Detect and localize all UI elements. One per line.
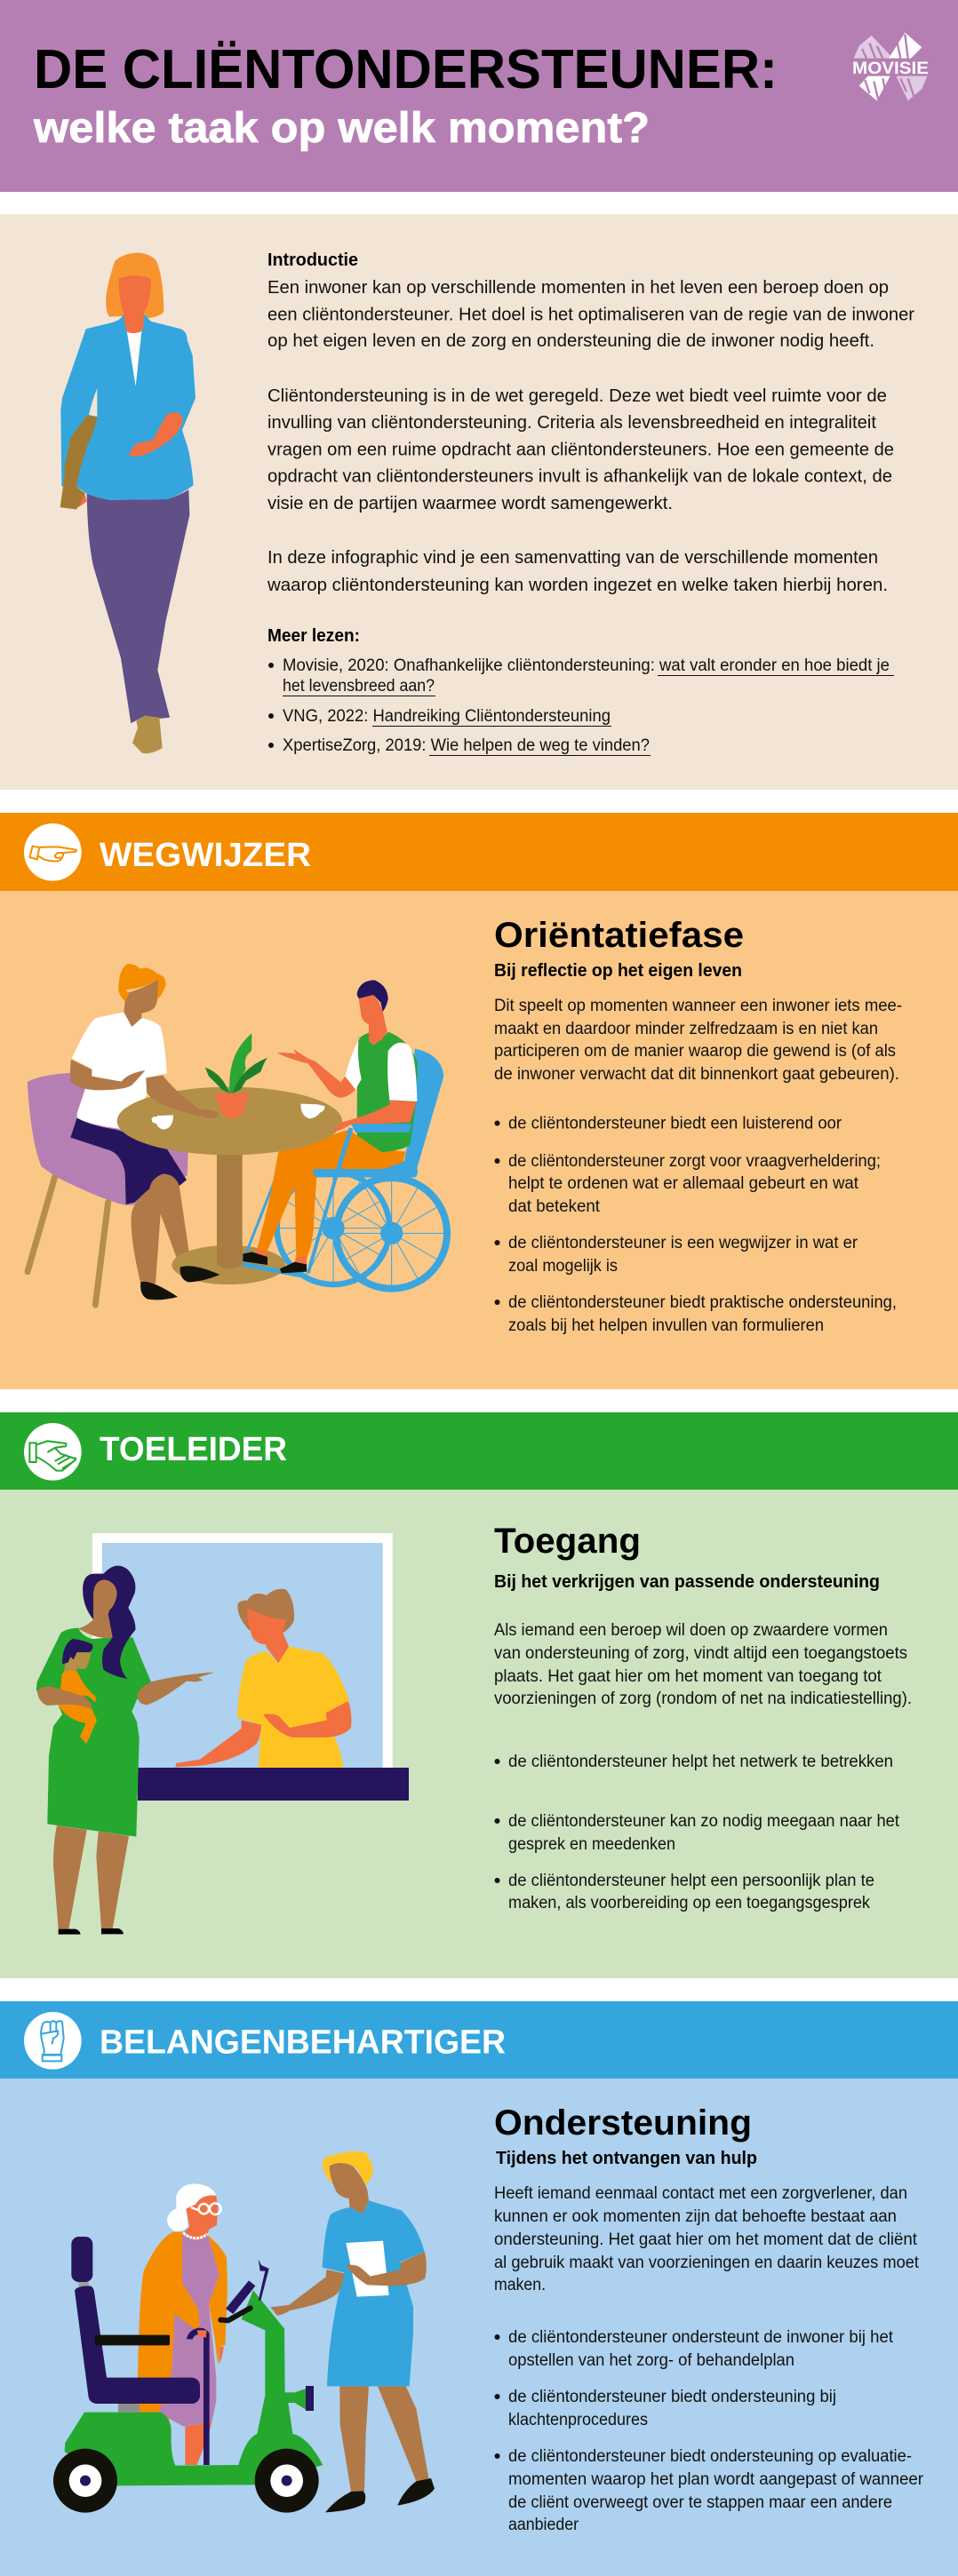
illustration: older woman at mobility scooter with caregiver <box>53 2151 435 2513</box>
text block: meer lezen: VNG, 2022: Handreiking Cliëntondersteuning <box>283 707 611 726</box>
banner: toeleider <box>0 1412 958 1490</box>
list: tasks belangenbehartiger: aanbieder <box>508 2516 579 2534</box>
panel: introductie <box>0 214 958 790</box>
list: tasks toeleider: de cliëntondersteuner helpt het netwerk te betrekken <box>508 1753 893 1771</box>
text block: introductie: vragen om een ruime opdracht aan cliëntondersteuners. Hoe een gemeente de <box>267 439 894 460</box>
text block: meer lezen: Meer lezen: <box>267 625 360 646</box>
text block: introductie: Introductie <box>267 250 358 270</box>
subheading: Bij reflectie op het eigen leven <box>494 960 742 981</box>
list: tasks wegwijzer: de cliëntondersteuner biedt een luisterend oor <box>508 1114 842 1133</box>
text block: description: al gebruik maakt van voorzieningen en daarin keuzes moet <box>494 2254 920 2272</box>
text block: description: Heeft iemand eenmaal contact met een zorgverlener, dan <box>494 2184 907 2203</box>
list: tasks wegwijzer: helpt te ordenen wat er allemaal gebeurt en wat <box>508 1174 859 1193</box>
text block: meer lezen: Movisie, 2020: Onafhankelijke cliëntondersteuning: wat valt eronder en hoe biedt je <box>283 656 890 675</box>
text block: introductie: opdracht van cliëntondersteuners invult is afhankelijk van de lokale context, de <box>267 465 892 487</box>
list: tasks belangenbehartiger: de cliënt overweegt over te stappen maar een andere <box>508 2493 892 2512</box>
heading: orientatiefase: Oriëntatiefase <box>494 916 744 955</box>
icon: raised fist <box>24 2012 82 2070</box>
panel: toeleider <box>0 1412 958 1978</box>
logo: Movisie: MOVISIE <box>852 60 929 78</box>
text block: description: maakt en daardoor minder zelfredzaam is en niet kan <box>494 1020 878 1038</box>
text block: meer lezen: XpertiseZorg, 2019: Wie helpen de weg te vinden? <box>283 736 650 755</box>
text block: introductie <box>267 250 914 595</box>
list: tasks belangenbehartiger: klachtenprocedures <box>508 2411 648 2429</box>
title: DE CLIËNTONDERSTEUNER: <box>34 39 778 100</box>
text block: description: van ondersteuning of zorg, vindt altijd een toegangstoets <box>494 1644 907 1663</box>
banner: belangenbehartiger <box>0 2001 958 2079</box>
text block: description <box>494 997 902 1084</box>
list: tasks wegwijzer: de cliëntondersteuner zorgt voor vraagverheldering; <box>508 1152 881 1171</box>
list: tasks wegwijzer <box>494 1114 897 1335</box>
subheading: Bij het verkrijgen van passende ondersteuning <box>494 1571 880 1592</box>
text block: description: plaats. Het gaat hier om het moment van toegang tot <box>494 1667 882 1686</box>
text block: introductie: Een inwoner kan op verschillende momenten in het leven een beroep doen op <box>267 277 889 298</box>
text block: description: Dit speelt op momenten wanneer een inwoner iets mee- <box>494 997 902 1015</box>
text block: introductie: invulling van cliëntondersteuning. Criteria als levensbreedheid en integraliteit <box>267 412 876 433</box>
text block: introductie: In deze infographic vind je een samenvatting van de verschillende momenten <box>267 547 878 568</box>
illustration: mother with child at a window <box>36 1533 409 1935</box>
text block: description: de inwoner verwacht dat dit binnenkort gaat gebeuren). <box>494 1065 899 1084</box>
subtitle: welke taak op welk moment? <box>33 105 650 152</box>
text block: meer lezen: het levensbreed aan? <box>283 677 435 696</box>
text block: introductie: visie en de partijen waarmee wordt samengewerkt. <box>267 493 673 513</box>
text block: description: participeren om de manier waarop die gewend is (of als <box>494 1042 896 1061</box>
text block: description <box>494 2184 920 2294</box>
list: tasks toeleider: gesprek en meedenken <box>508 1835 675 1854</box>
panel: header <box>0 0 958 192</box>
text block: description: maken. <box>494 2276 546 2294</box>
list: tasks wegwijzer: de cliëntondersteuner biedt praktische ondersteuning, <box>508 1293 897 1312</box>
illustration: walking woman with bag <box>60 253 196 753</box>
list: tasks belangenbehartiger: opstellen van het zorg- of behandelplan <box>508 2351 794 2370</box>
text block: description: Als iemand een beroep wil doen op zwaardere vormen <box>494 1621 888 1640</box>
heading: toegang: Toegang <box>494 1522 641 1561</box>
heading: toeleider: TOELEIDER <box>100 1431 287 1468</box>
panel: wegwijzer <box>0 813 958 1389</box>
text block: introductie: op het eigen leven en de zorg en ondersteuning die de inwoner nodig heeft. <box>267 330 874 351</box>
list: tasks toeleider: de cliëntondersteuner kan zo nodig meegaan naar het <box>508 1812 900 1831</box>
heading: belangenbehartiger: BELANGENBEHARTIGER <box>100 2023 506 2061</box>
icon: pointing hand <box>24 823 82 881</box>
list: tasks belangenbehartiger <box>494 2328 924 2534</box>
text block: introductie: waarop cliëntondersteuning kan worden ingezet en welke taken hierbij horen. <box>267 575 888 595</box>
list: tasks belangenbehartiger: de cliëntondersteuner ondersteunt de inwoner bij het <box>508 2328 894 2347</box>
list: tasks toeleider <box>494 1753 900 1912</box>
text block: description: ondersteuning. Het gaat hier om het moment dat de cliënt <box>494 2230 918 2249</box>
list: tasks wegwijzer: zoals bij het helpen invullen van formulieren <box>508 1316 824 1335</box>
text block: description: kunnen er ook momenten zijn dat behoefte bestaat aan <box>494 2207 897 2226</box>
panel: belangenbehartiger <box>0 2001 958 2576</box>
text block: introductie: Cliëntondersteuning is in de wet geregeld. Deze wet biedt veel ruimte voor de <box>267 386 887 406</box>
text block: introductie: een cliëntondersteuner. Het doel is het optimaliseren van de regie van de inwoner <box>267 304 914 325</box>
text block: meer lezen <box>267 625 894 755</box>
list: tasks wegwijzer: de cliëntondersteuner is een wegwijzer in wat er <box>508 1234 858 1252</box>
list: tasks toeleider: maken, als voorbereiding op een toegangsgesprek <box>508 1894 870 1912</box>
list: tasks belangenbehartiger: momenten waarop het plan wordt aangepast of wanneer <box>508 2470 924 2489</box>
text block: description: voorzieningen of zorg (rondom of net na indicatiestelling). <box>494 1690 912 1708</box>
list: tasks belangenbehartiger: de cliëntondersteuner biedt ondersteuning bij <box>508 2388 836 2406</box>
logo: Movisie <box>852 33 929 100</box>
list: tasks wegwijzer: zoal mogelijk is <box>508 1257 618 1276</box>
list: tasks toeleider: de cliëntondersteuner helpt een persoonlijk plan te <box>508 1872 874 1890</box>
list: tasks belangenbehartiger: de cliëntondersteuner biedt ondersteuning op evaluatie- <box>508 2447 912 2466</box>
banner: wegwijzer <box>0 813 958 891</box>
icon: open hand <box>24 1423 82 1481</box>
list: tasks wegwijzer: dat betekent <box>508 1197 601 1216</box>
heading: ondersteuning: Ondersteuning <box>494 2103 752 2143</box>
heading: wegwijzer: WEGWIJZER <box>100 837 311 874</box>
text block: description <box>494 1621 912 1708</box>
illustration: conversation at table with wheelchair user <box>28 964 447 1305</box>
subheading: Tijdens het ontvangen van hulp <box>496 2148 757 2168</box>
